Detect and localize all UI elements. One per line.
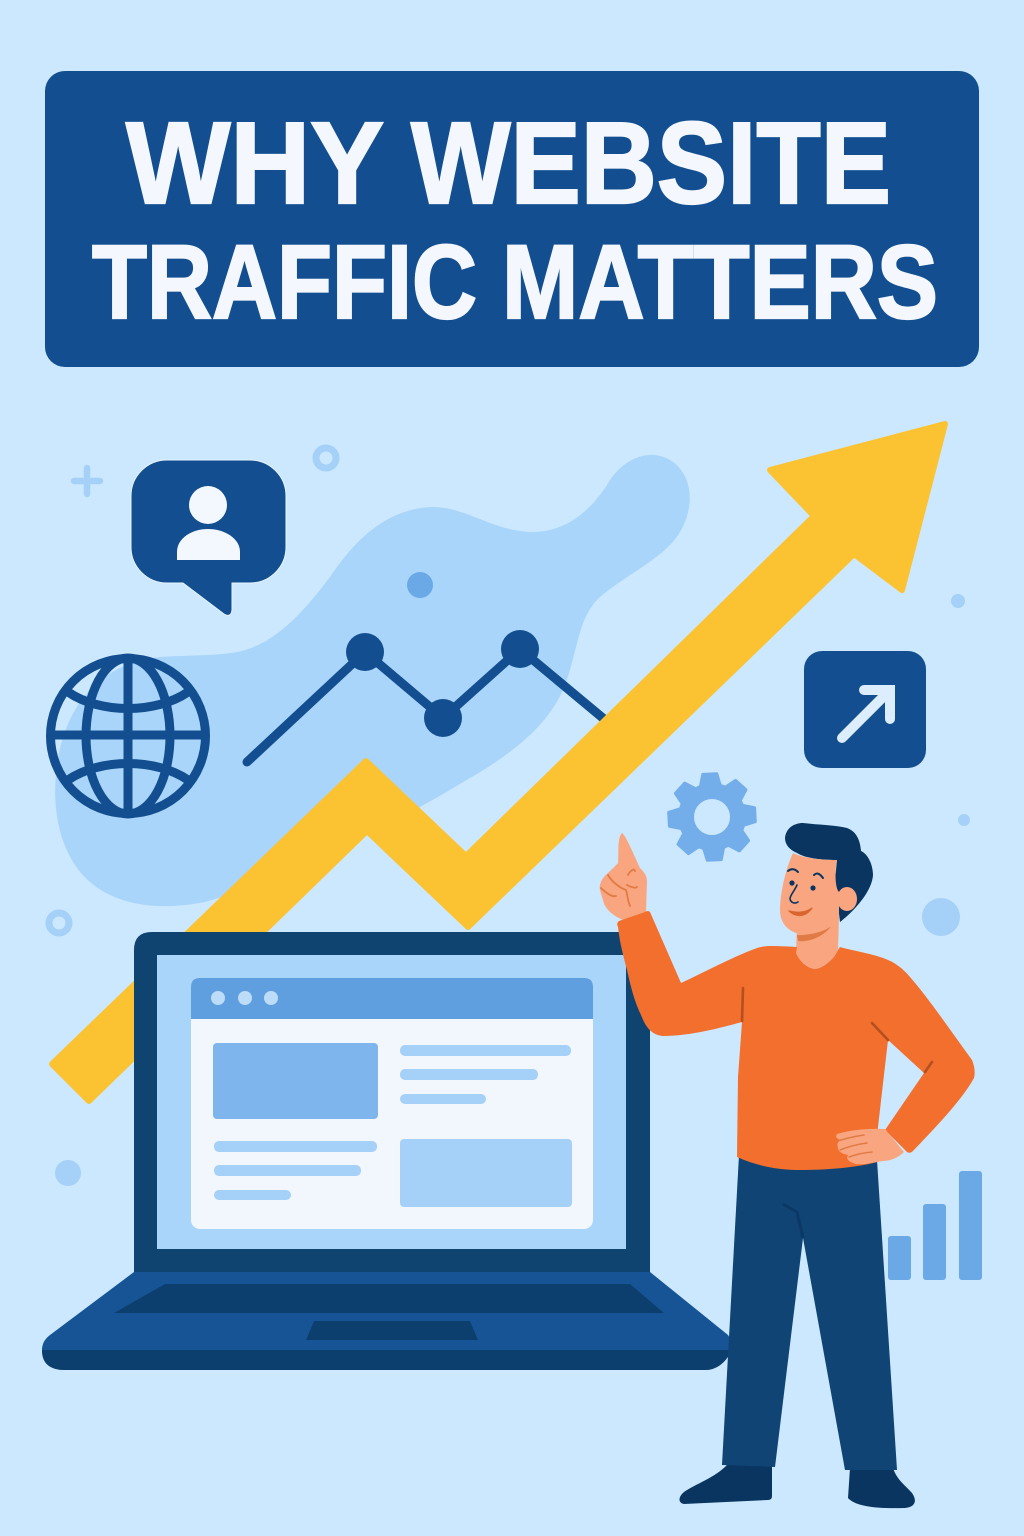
- eyebrows: [788, 869, 823, 878]
- dot in blob: [407, 572, 433, 598]
- title line 1: WEBSITE: [411, 98, 891, 228]
- text lines right: [400, 1045, 571, 1104]
- box: [804, 651, 926, 768]
- window body: [191, 978, 593, 1229]
- title line 1: WHY: [126, 98, 384, 228]
- title line 2: [92, 224, 938, 341]
- trouser crease: [783, 1204, 803, 1238]
- laptop: [42, 932, 732, 1370]
- diagonal arrow: [842, 692, 888, 738]
- title panel: [45, 71, 979, 367]
- hand on hip: [836, 1129, 904, 1164]
- arrow head: [864, 690, 890, 719]
- mouth: [789, 908, 812, 916]
- title line 2: TRAFFIC: [92, 224, 477, 341]
- laptop screen: [157, 955, 626, 1249]
- neck: [796, 915, 839, 969]
- eyes: [789, 880, 816, 891]
- person: [600, 823, 975, 1508]
- sweater: [617, 911, 975, 1170]
- decorative dot left lower: [55, 1160, 81, 1186]
- chart point 3: [501, 630, 539, 668]
- keyboard: [114, 1284, 664, 1313]
- title banner: [45, 71, 979, 367]
- hand finger lines: [601, 870, 637, 906]
- face: [780, 853, 839, 934]
- decorative dot right middle: [958, 814, 970, 826]
- content block: [400, 1139, 572, 1207]
- background blob: [55, 455, 690, 906]
- laptop base: [42, 1272, 732, 1370]
- decorative dot right large: [922, 898, 960, 936]
- line chart: [247, 630, 610, 762]
- hair: [785, 823, 873, 922]
- sweater folds: [742, 988, 932, 1072]
- window dots: [211, 991, 278, 1005]
- browser window: [191, 978, 593, 1229]
- nose: [790, 885, 798, 903]
- raised hand: [600, 833, 647, 920]
- chart line: [247, 649, 610, 762]
- title line 1: [126, 98, 891, 228]
- decorative ring top: [316, 448, 336, 468]
- trousers: [722, 1155, 897, 1470]
- text lines left: [214, 1141, 377, 1200]
- growth arrow: [52, 424, 945, 1101]
- icon: arrow box: [804, 651, 926, 768]
- chart point 1: [346, 633, 384, 671]
- icon: globe: [50, 658, 206, 814]
- decorative dot right upper: [951, 594, 965, 608]
- decorative plus: [74, 468, 100, 494]
- hand finger lines lower: [838, 1135, 872, 1157]
- icon: user speech bubble: [131, 460, 286, 615]
- left shoe: [680, 1464, 772, 1504]
- neck shadow: [797, 920, 834, 941]
- touchpad: [306, 1321, 478, 1340]
- window header: [191, 978, 593, 1019]
- right shoe: [848, 1468, 915, 1508]
- decorative ring left: [49, 913, 69, 933]
- image block: [213, 1043, 378, 1119]
- laptop bezel: [134, 932, 650, 1272]
- user shoulders: [177, 529, 240, 560]
- ear: [837, 887, 857, 911]
- icon: gear: [669, 774, 755, 860]
- user head: [189, 486, 227, 524]
- chart point 2: [424, 699, 462, 737]
- base front edge: [42, 1350, 732, 1370]
- mini bar chart: [888, 1171, 982, 1280]
- title line 2: MATTERS: [502, 224, 938, 341]
- bubble shape: [131, 460, 286, 615]
